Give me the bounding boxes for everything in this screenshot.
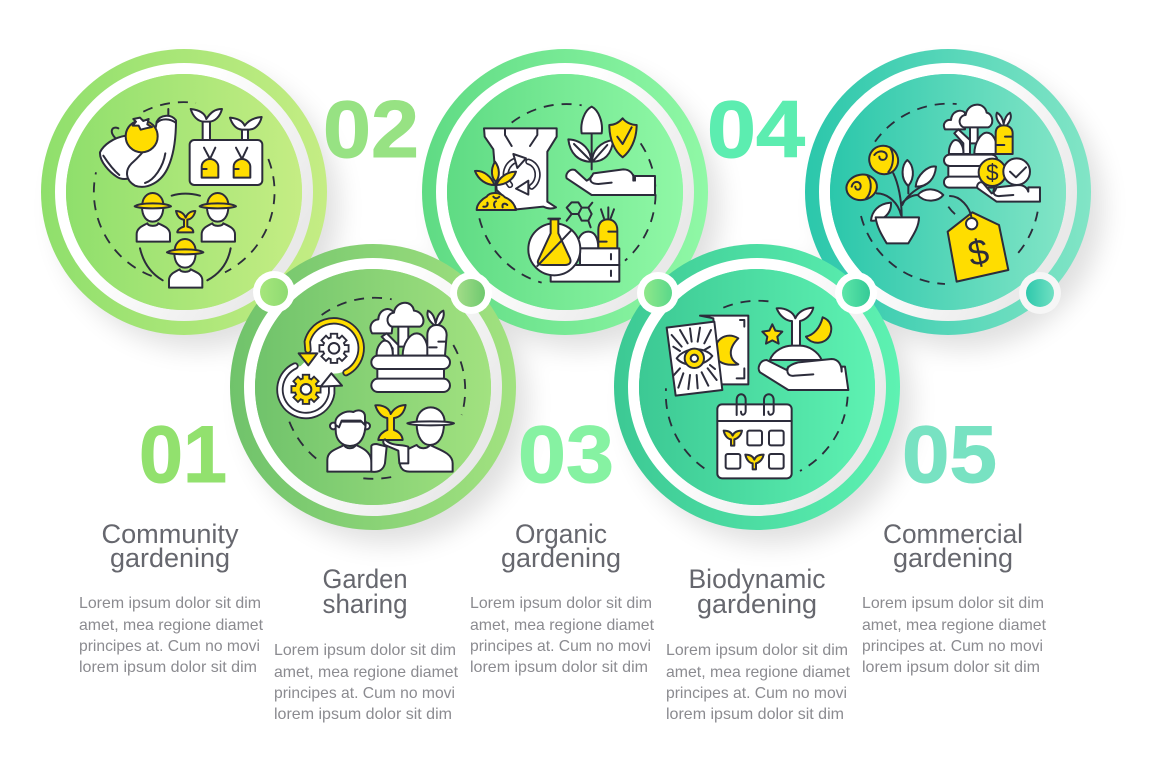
heading: organic gardening: gardening <box>501 543 621 573</box>
text block: commercial gardening <box>862 595 1047 676</box>
text block: commercial gardening: amet, mea regione diamet <box>862 617 1047 634</box>
text block: garden sharing: Lorem ipsum dolor sit dim <box>274 642 456 659</box>
icon: rose plant, harvest payment and price tag: $ <box>986 159 999 185</box>
icon: shared gears, harvest basket and two gardeners <box>280 298 465 479</box>
number 05: 05 <box>902 410 997 500</box>
number 02: 02 <box>323 85 419 175</box>
heading: biodynamic gardening: gardening <box>697 589 817 619</box>
heading: garden sharing: Garden <box>322 564 408 594</box>
text block: garden sharing <box>274 642 459 723</box>
icon: fertilizer bag, plant protection and no-chemicals crate <box>475 104 656 283</box>
text block: biodynamic gardening: principes at. Cum no movi <box>666 685 847 702</box>
icon: tarot cards, sprout in hand and planting calendar <box>666 301 848 478</box>
heading: organic gardening: Organic <box>515 519 607 549</box>
number 03: 03 <box>518 410 614 500</box>
number 04: 04 <box>707 85 805 175</box>
heading: community gardening: gardening <box>110 543 230 573</box>
text block: community gardening: principes at. Cum no movi <box>79 638 260 655</box>
text block: organic gardening: Lorem ipsum dolor sit dim <box>470 595 652 612</box>
text block: biodynamic gardening <box>666 642 851 723</box>
text block: organic gardening <box>470 595 655 676</box>
text block: garden sharing: amet, mea regione diamet <box>274 664 459 681</box>
heading: organic gardening <box>501 519 621 573</box>
text block: biodynamic gardening: amet, mea regione diamet <box>666 664 851 681</box>
heading: commercial gardening <box>883 519 1023 573</box>
connector nodes <box>253 271 1061 314</box>
text block: community gardening: amet, mea regione diamet <box>79 617 264 634</box>
text block: organic gardening: lorem ipsum dolor sit dim <box>470 659 648 676</box>
text block: community gardening: lorem ipsum dolor sit dim <box>79 659 257 676</box>
panel: circle 3 organic gardening <box>422 49 708 335</box>
text block: garden sharing: principes at. Cum no movi <box>274 685 455 702</box>
icon: rose plant, harvest payment and price tag: $ <box>964 230 992 274</box>
text block: commercial gardening: Lorem ipsum dolor sit dim <box>862 595 1044 612</box>
panel: circle 5 commercial gardening <box>805 49 1091 335</box>
heading: biodynamic gardening <box>688 564 826 619</box>
number 01: 01 <box>139 410 227 500</box>
heading: community gardening: Community <box>102 519 239 549</box>
text block: commercial gardening: principes at. Cum no movi <box>862 638 1043 655</box>
panel: circle 4 biodynamic gardening <box>614 244 900 530</box>
drop shadows of circles <box>57 67 1103 544</box>
text block: biodynamic gardening: Lorem ipsum dolor sit dim <box>666 642 848 659</box>
text block: organic gardening: principes at. Cum no movi <box>470 638 651 655</box>
panel: circle 1 community gardening <box>41 49 327 335</box>
panel: circle 2 garden sharing <box>230 244 516 530</box>
text block: organic gardening: amet, mea regione diamet <box>470 617 655 634</box>
heading: biodynamic gardening: Biodynamic <box>688 564 826 594</box>
heading: commercial gardening: gardening <box>893 543 1013 573</box>
heading: commercial gardening: Commercial <box>883 519 1023 549</box>
text block: garden sharing: lorem ipsum dolor sit dim <box>274 706 452 723</box>
text block: biodynamic gardening: lorem ipsum dolor sit dim <box>666 706 844 723</box>
heading: garden sharing <box>322 564 408 619</box>
text block: community gardening: Lorem ipsum dolor sit dim <box>79 595 261 612</box>
heading: garden sharing: sharing <box>322 589 408 619</box>
text block: community gardening <box>79 595 264 676</box>
icon: vegetables, seedlings and farmers <box>94 102 275 288</box>
text block: commercial gardening: lorem ipsum dolor sit dim <box>862 659 1040 676</box>
icon: rose plant, harvest payment and price tag <box>844 104 1040 284</box>
heading: community gardening <box>102 519 239 573</box>
